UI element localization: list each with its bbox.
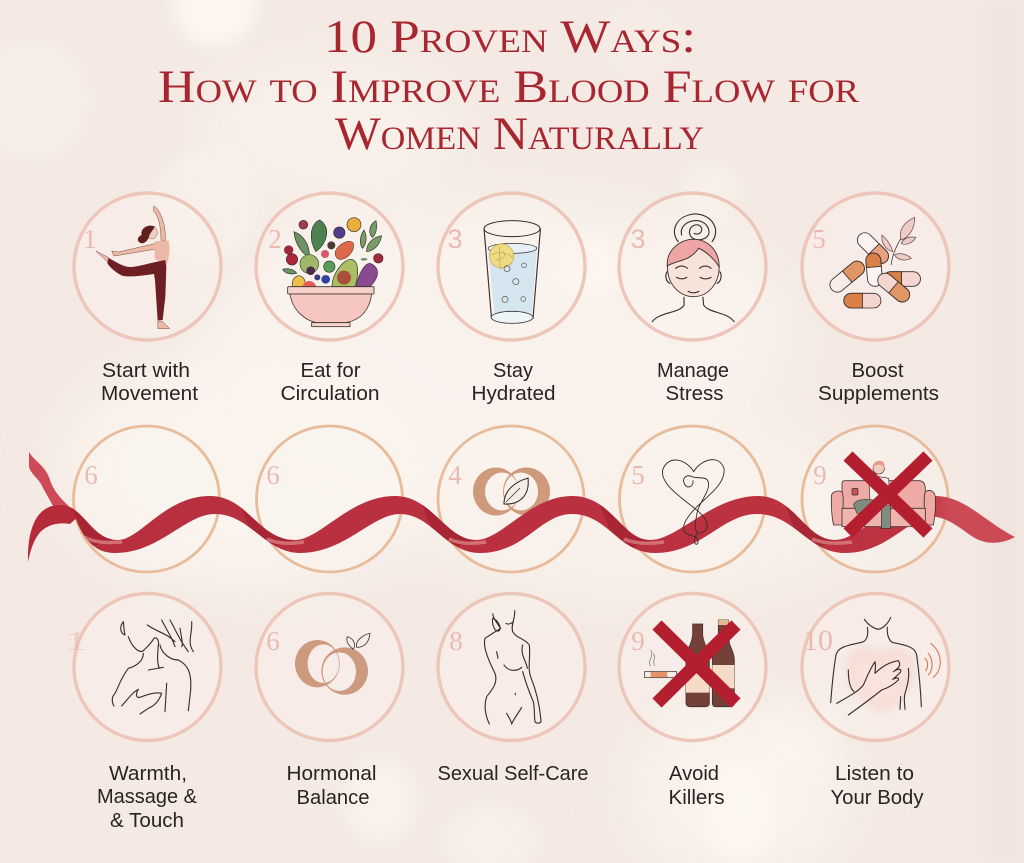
panel: Stay Hydrated: 3 [447,224,463,254]
label [286,763,376,809]
panel: Sexual Self-Care: 8 [449,626,463,656]
ribbon [28,452,1015,562]
title: How to Improve Blood Flow for [158,61,859,113]
icon: salad bowl [283,218,383,327]
row 2 rings and numbers: 4 [448,460,462,490]
panel: Manage Stress [619,193,766,405]
icon: glowing heart [851,651,911,708]
row 2 rings and numbers [74,426,948,572]
label: Hormonal [286,763,376,785]
title [158,11,859,160]
panel: Hormonal Balance: 6 [266,626,280,656]
icon: linked rings [295,633,370,695]
icon: looping heart [662,460,724,544]
icon: abstract torso line art [484,611,541,724]
icon: person on couch [831,461,936,528]
panel: Listen to Your Body [802,594,949,809]
label: Manage [657,360,729,382]
label: Massage & [97,786,198,808]
panel: Start with Movement: 1 [83,224,97,254]
row 2 rings and numbers: 6 [84,460,98,490]
title: 10 Proven Ways: [324,11,696,63]
icon: dancer [96,206,170,329]
icon: red cross over couch [848,456,928,533]
icon: calm woman with spiral [652,214,734,322]
icon: hand on chest line art [112,620,193,714]
label: Hydrated [472,383,556,405]
panel: Hormonal Balance [256,594,403,809]
panel: Listen to Your Body: 10 [803,624,833,657]
row 2 rings and numbers: 5 [631,460,645,490]
panel: Stay Hydrated [438,193,585,405]
icon: hand on chest with sound waves [831,617,940,715]
panel: Sexual Self-Care [438,594,588,785]
label [280,360,380,405]
icon: water glass [484,221,540,323]
label: Warmth, [109,763,187,785]
label: Listen to [835,763,914,785]
label: Stay [493,360,533,382]
label [818,360,939,405]
label: & Touch [110,810,184,832]
label: Boost [852,360,904,382]
row 2 rings and numbers: 9 [813,460,827,490]
icon: capsules and herb [827,217,920,308]
panel: Eat for Circulation [256,193,403,405]
label [97,763,198,832]
label: Start with [102,360,190,382]
label: Balance [296,787,370,809]
label [830,763,924,809]
panel: Avoid Killers [619,594,766,809]
icon: cigarette and bottles [645,620,734,707]
icon: red cross over bottles [657,625,736,703]
label: Avoid [669,763,719,785]
label [668,763,724,809]
label: Circulation [280,383,380,405]
label [101,360,198,405]
panel: Eat for Circulation: 2 [268,224,282,254]
panel: Boost Supplements [802,193,949,405]
panel: Warmth, Massage and Touch: 1 [63,626,89,656]
panel: Manage Stress: 3 [630,224,646,254]
label [657,360,729,405]
panel: Start with Movement [74,193,221,405]
label: Your Body [830,787,924,809]
label: Eat for [300,360,361,382]
panel: Warmth, Massage and Touch [63,594,221,832]
title: Women Naturally [335,108,704,160]
icon: linked rings with leaf [473,468,550,516]
label: Killers [668,787,724,809]
label: Movement [101,383,198,405]
label: Sexual Self-Care [438,763,588,785]
row 2 rings and numbers: 6 [266,460,280,490]
label [472,360,556,405]
label: Stress [666,383,724,405]
panel: Boost Supplements: 5 [812,224,826,254]
label: Supplements [818,383,939,405]
panel: Avoid Killers: 9 [631,626,645,656]
